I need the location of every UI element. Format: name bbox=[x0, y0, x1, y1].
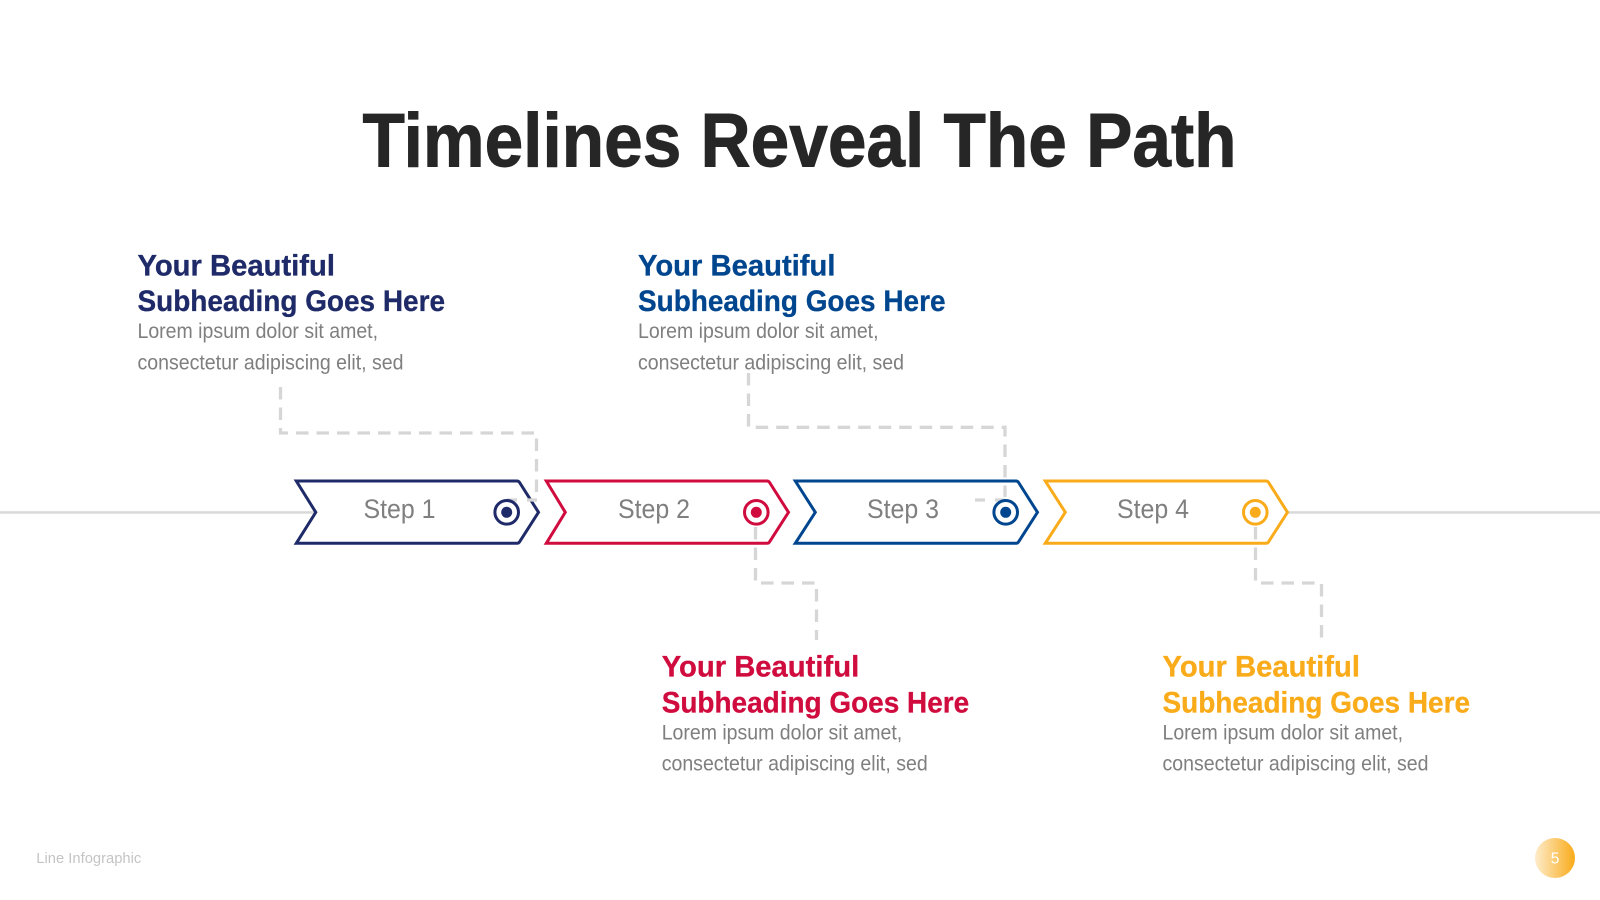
text block: step 3 bbox=[638, 249, 946, 374]
text block: step 1: Your Beautiful bbox=[138, 249, 335, 282]
page number badge: 5 bbox=[1551, 850, 1559, 868]
text block: step 2: consectetur adipiscing elit, sed bbox=[662, 753, 928, 776]
text block: step 3: Your Beautiful bbox=[638, 249, 836, 282]
text block: step 4: Subheading Goes Here bbox=[1162, 686, 1470, 720]
step 4 label: Step 4 bbox=[1117, 494, 1189, 524]
step 4 chevron bbox=[1045, 481, 1288, 543]
text block: step 2: Subheading Goes Here bbox=[662, 686, 969, 720]
connector: step 3 bbox=[748, 373, 1005, 500]
page number badge bbox=[1535, 838, 1575, 878]
marker: step 2 bbox=[744, 500, 768, 524]
text block: step 3: consectetur adipiscing elit, sed bbox=[638, 351, 904, 374]
baseline: right segment bbox=[1288, 511, 1600, 514]
text block: step 1: Lorem ipsum dolor sit amet, bbox=[138, 320, 378, 343]
text block: step 4: Lorem ipsum dolor sit amet, bbox=[1162, 722, 1403, 744]
marker: step 3 bbox=[994, 500, 1018, 524]
baseline: left segment bbox=[0, 511, 316, 514]
text block: step 4: consectetur adipiscing elit, sed bbox=[1162, 753, 1428, 776]
step 1 chevron bbox=[296, 481, 538, 543]
text block: step 2: Lorem ipsum dolor sit amet, bbox=[662, 722, 902, 744]
title: Timelines Reveal The Path bbox=[362, 98, 1236, 184]
connector: step 2 bbox=[756, 527, 816, 640]
text block: step 3: Lorem ipsum dolor sit amet, bbox=[638, 320, 878, 343]
text block: step 1: consectetur adipiscing elit, sed bbox=[138, 351, 404, 374]
step 2 chevron bbox=[546, 481, 788, 543]
step 2 label: Step 2 bbox=[618, 494, 690, 524]
connector: step 4 bbox=[1256, 527, 1322, 640]
text block: step 2 bbox=[662, 651, 969, 776]
step 3 chevron bbox=[795, 481, 1038, 543]
text block: step 4 bbox=[1162, 651, 1470, 776]
marker: step 4 bbox=[1244, 500, 1267, 524]
text block: step 4: Your Beautiful bbox=[1162, 651, 1360, 684]
connector: step 1 bbox=[280, 387, 537, 500]
text block: step 2: Your Beautiful bbox=[662, 651, 859, 684]
marker: step 1 bbox=[495, 500, 518, 524]
text block: step 1 bbox=[138, 249, 445, 374]
step 3 label: Step 3 bbox=[867, 494, 939, 524]
footer label: Line Infographic bbox=[36, 850, 142, 867]
step 1 label: Step 1 bbox=[364, 494, 436, 524]
text block: step 3: Subheading Goes Here bbox=[638, 285, 946, 318]
text block: step 1: Subheading Goes Here bbox=[138, 285, 445, 318]
